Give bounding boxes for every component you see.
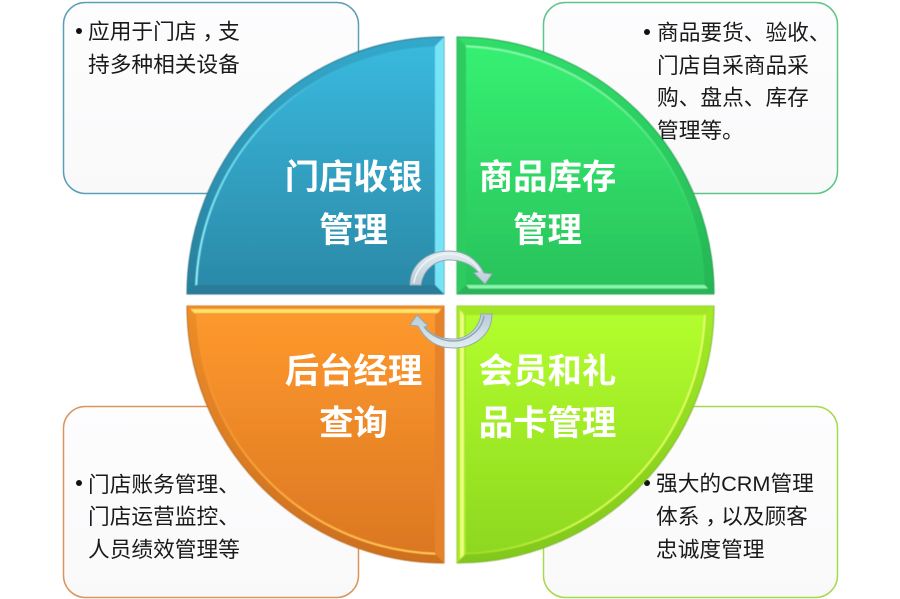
quadrant: inventory bbox=[457, 37, 714, 294]
heading: inventory: 管理 bbox=[513, 212, 582, 250]
heading: back office: 查询 bbox=[319, 405, 388, 443]
arrow: clockwise bottom bbox=[410, 314, 492, 348]
heading: membership bbox=[479, 353, 616, 443]
panel: membership description: 忠诚度管理 bbox=[656, 537, 764, 562]
heading: inventory bbox=[479, 159, 616, 250]
heading: inventory: 商品库存 bbox=[479, 159, 616, 197]
panel: membership description: 强大的CRM管理 bbox=[656, 471, 814, 496]
panel: membership description: 体系 ，以及顾客 bbox=[656, 504, 808, 529]
quadrant: membership bbox=[457, 306, 714, 563]
panel: inventory description bbox=[544, 2, 838, 194]
quadrant: back office bbox=[187, 306, 444, 563]
panel: inventory description: 管理等。 bbox=[657, 118, 744, 143]
panel: store checkout description bbox=[64, 2, 358, 194]
arrow: clockwise top bbox=[410, 251, 492, 285]
quadrant: store checkout bbox=[187, 37, 444, 294]
panel: back office description: 门店账务管理、 bbox=[88, 472, 240, 497]
heading: back office bbox=[285, 353, 422, 443]
panel: store checkout description: 应用于门店 ，支 bbox=[88, 19, 240, 44]
panel: inventory description: 门店自采商品采 bbox=[657, 53, 809, 78]
panel: store checkout description: 持多种相关设备 bbox=[88, 52, 240, 77]
panel: inventory description: 购、盘点、库存 bbox=[657, 85, 809, 110]
panel: back office description: 人员绩效管理等 bbox=[88, 537, 240, 562]
heading: store checkout: 管理 bbox=[319, 212, 388, 250]
panel: back office description bbox=[64, 406, 358, 598]
panel: back office description: 门店运营监控、 bbox=[88, 504, 240, 529]
heading: store checkout: 门店收银 bbox=[285, 159, 422, 197]
panel: inventory description: 商品要货、验收、 bbox=[657, 20, 831, 45]
heading: store checkout bbox=[285, 159, 422, 250]
heading: back office: 后台经理 bbox=[285, 353, 422, 391]
heading: membership: 会员和礼 bbox=[479, 353, 616, 391]
panel: membership description bbox=[544, 406, 838, 598]
heading: membership: 品卡管理 bbox=[479, 405, 616, 443]
